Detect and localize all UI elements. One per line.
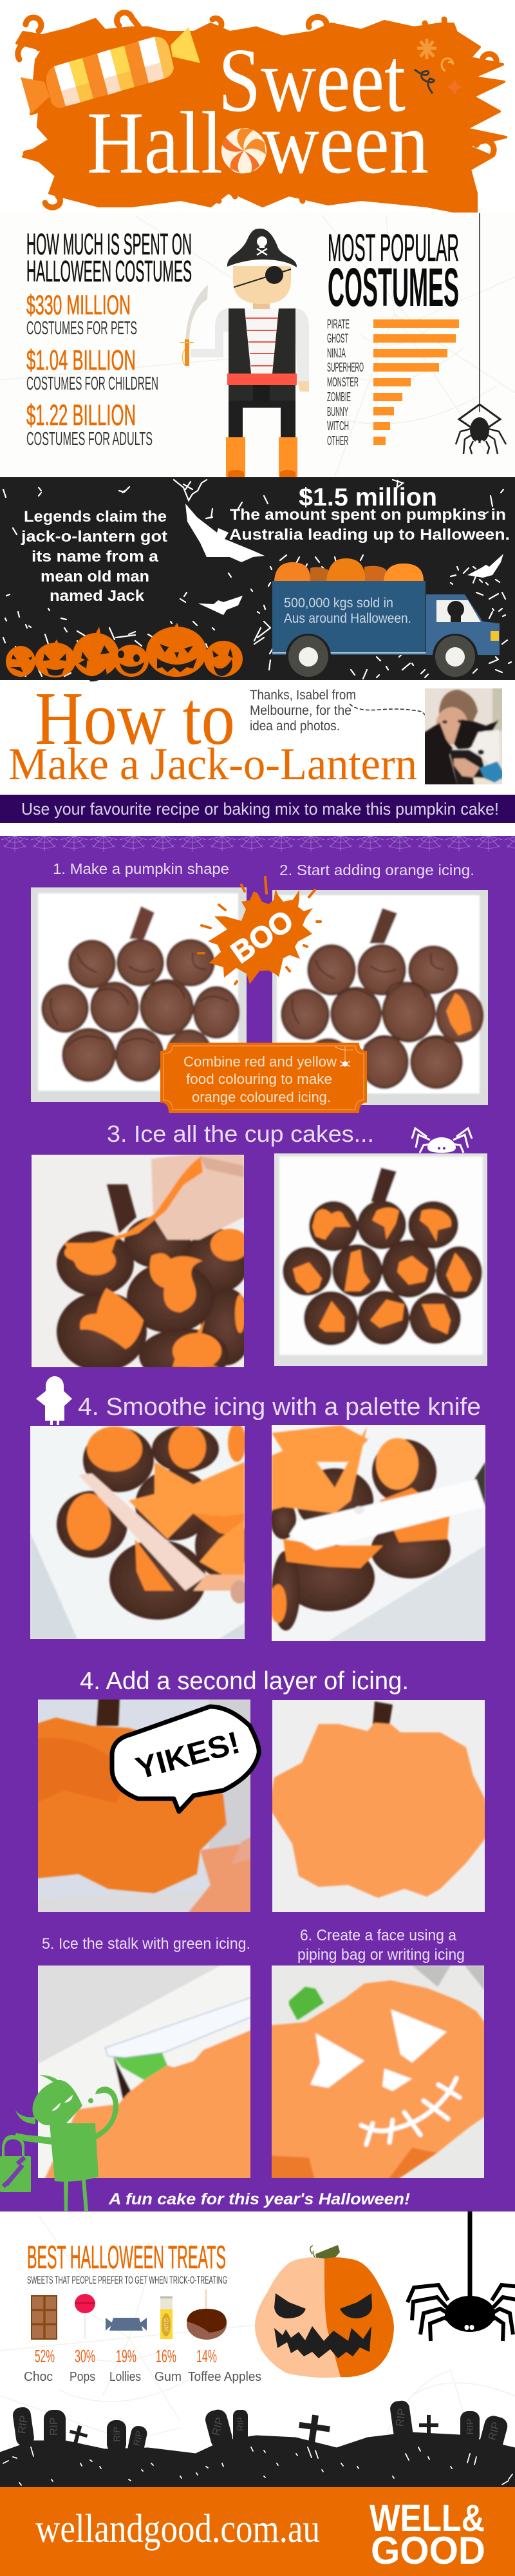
splat: boo: BOO (225, 904, 299, 969)
photo: green stalk (38, 1965, 250, 2178)
icon: ghost (36, 1376, 72, 1425)
callout text: food colouring to make (186, 1071, 332, 1087)
stat: adults (26, 399, 153, 450)
bar chart: popular costumes (327, 317, 459, 448)
logo: well and good (370, 2497, 485, 2572)
hat (227, 229, 297, 267)
photo: Isabel with cat (425, 688, 502, 784)
legs (229, 401, 295, 437)
RIP labels: RIP (393, 2408, 408, 2427)
panel: costumes section (0, 213, 515, 477)
belt (227, 374, 297, 385)
stat: pets: COSTUMES FOR PETS (26, 318, 137, 339)
RIP labels: RIP (131, 2430, 144, 2447)
text: legends claim: its name from a (32, 548, 159, 565)
title text: Sweet: Sweet (218, 29, 406, 131)
RIP labels: RIP (465, 2418, 476, 2435)
heading: make a jack-o-lantern: Make a Jack-o-Lantern (8, 739, 417, 790)
step 6 title: 6. Create a face using a (300, 1927, 457, 1944)
callout spider (335, 1046, 353, 1066)
wheels (286, 634, 478, 679)
logo: well and good: WELL& (370, 2497, 485, 2539)
text: legends claim (21, 508, 167, 605)
bar chart: popular costumes: BUNNY (327, 405, 348, 419)
step 1 title: 1. Make a pumpkin shape (53, 860, 229, 877)
icon: lollipop (75, 2294, 95, 2339)
photo: second layer left (38, 1700, 250, 1912)
bar chart: popular costumes: OTHER (327, 434, 348, 448)
icons: bats (185, 504, 503, 615)
web pattern band (0, 836, 515, 853)
step 4 title: 4. Smoothe icing with a palette knife (78, 1394, 481, 1421)
panel: title banner (17, 13, 506, 213)
dark background (0, 477, 515, 680)
callout: yikes speech bubble: YIKES! (132, 1726, 243, 1786)
text: thanks isabel: Thanks, Isabel from (250, 688, 356, 703)
logo: well and good: GOOD (371, 2529, 485, 2572)
footer background (0, 2487, 515, 2576)
icon: peppermint swirl (221, 128, 267, 173)
panel: jack-o-lantern facts (dark) (0, 477, 515, 681)
stat: pets: $330 MILLION (26, 290, 131, 321)
photo: second layer right (272, 1700, 485, 1912)
eye patch (234, 266, 291, 287)
text: legends claim: Legends claim the (24, 508, 167, 526)
treat percentages: 30% (75, 2346, 95, 2366)
purple background (0, 836, 515, 2211)
photo: iced pumpkin cupcakes (274, 1153, 487, 1366)
splat: boo (198, 877, 321, 984)
illustration: green monster (0, 2075, 118, 2211)
truck text: 500,000 kgs sold in (284, 596, 393, 611)
treat labels: Lollies (109, 2370, 141, 2384)
truck stripe (272, 652, 498, 654)
hand (297, 381, 309, 392)
stat: children: $1.04 BILLION (26, 345, 136, 376)
sword (180, 285, 208, 366)
bar chart: popular costumes: WITCH (327, 419, 349, 433)
stat: adults: $1.22 BILLION (26, 399, 136, 431)
treat percentages: 52% (35, 2346, 55, 2366)
step 6 title (297, 1927, 465, 1964)
subheading: SWEETS THAT PEOPLE PREFER TO GET WHEN TRICK-O-TREATING (27, 2274, 227, 2286)
icon: gum (160, 2296, 173, 2339)
panel: recipe steps (0, 836, 515, 2211)
treat percentages: 14% (196, 2346, 217, 2366)
stat: 1.5 million: $1.5 million (299, 484, 437, 511)
icon: wrapped lolly (106, 2318, 147, 2331)
headlight (491, 631, 499, 641)
treat labels: Choc (24, 2370, 53, 2384)
icon: hanging spider (456, 213, 506, 454)
text: thanks isabel (250, 688, 356, 734)
text: legends claim: named Jack (50, 587, 145, 605)
stat: pets (26, 290, 137, 339)
illustration: row of jack-o-lanterns (6, 623, 243, 681)
icon: white spider (412, 1128, 472, 1153)
illustration: truck (272, 558, 500, 679)
treat labels: Toffee Apples (188, 2370, 261, 2384)
icon: sparkles (415, 39, 462, 95)
truck box (272, 581, 426, 655)
bar chart: popular costumes: SUPERHERO (327, 361, 364, 375)
hills (0, 2432, 515, 2488)
pumpkin load (274, 558, 424, 581)
callout text: orange coloured icing. (192, 1089, 331, 1105)
callout: food colouring (160, 1043, 367, 1113)
treat labels (24, 2370, 261, 2384)
text: thanks isabel: idea and photos. (250, 719, 340, 734)
panel: footer (0, 2487, 515, 2576)
photo: finished face (272, 1965, 484, 2178)
photo: start adding icing (272, 890, 488, 1105)
text: legends claim: jack-o-lantern got (21, 528, 167, 545)
cobweb background (0, 2215, 515, 2441)
panel: best halloween treats (0, 2211, 515, 2441)
icon: gum: GUM (163, 2318, 169, 2331)
website: wellandgood.com.au (35, 2507, 320, 2551)
step 3 title: 3. Ice all the cup cakes... (107, 1121, 374, 1147)
treat percentages (35, 2346, 217, 2366)
torso vest (229, 308, 295, 401)
RIP labels: RIP (486, 2421, 502, 2441)
photo: smoothing left (30, 1426, 245, 1639)
text: amount spent (229, 506, 510, 544)
bar chart: popular costumes: ZOMBIE (327, 390, 351, 404)
ground specks (3, 2447, 512, 2485)
truck text: Aus around Halloween. (284, 611, 411, 626)
head (233, 266, 291, 304)
illustration: half pumpkin (255, 2245, 394, 2378)
stat: children (26, 345, 158, 394)
step 4 second title: 4. Add a second layer of icing. (80, 1667, 409, 1695)
stat: adults: COSTUMES FOR ADULTS (26, 429, 153, 450)
text: amount spent: Australia leading up to Halloween. (229, 526, 510, 544)
treat percentages: 19% (116, 2346, 136, 2366)
RIP labels: RIP (236, 2417, 245, 2431)
step 5 title: 5. Ice the stalk with green icing. (42, 1935, 250, 1953)
bar chart: popular costumes: PIRATE (327, 317, 350, 332)
truck cab (426, 594, 500, 655)
bar chart: popular costumes: GHOST (327, 332, 348, 346)
photo: smoothing right (272, 1425, 485, 1641)
icon: striped candy (21, 27, 200, 114)
step 2 title: 2. Start adding orange icing. (279, 862, 474, 878)
text: legends claim: mean old man (41, 568, 149, 585)
illustration: graveyard (0, 2400, 515, 2488)
icon: toffee apple (187, 2289, 227, 2340)
step 6 title: piping bag or writing icing (297, 1946, 465, 1964)
neck (253, 303, 270, 309)
bar chart: popular costumes: NINJA (327, 346, 346, 361)
cobweb background (0, 216, 515, 477)
treat labels: Pops (70, 2370, 95, 2384)
RIP labels: RIP (210, 2416, 226, 2437)
arms (191, 308, 309, 381)
banner: use your favourite recipe: Use your favourite recipe or baking mix to make this pumpkin cake! (21, 799, 499, 819)
title text: Halloween: Halloween (87, 93, 429, 192)
icon: chocolate bar (32, 2296, 57, 2339)
illustration: pirate (180, 229, 309, 477)
heading: most popular costumes (328, 227, 459, 317)
striped shirt (245, 308, 279, 374)
arrow: dashed to photo (350, 704, 430, 719)
text: amount spent: The amount spent on pumpkins in (230, 506, 506, 524)
RIP labels: RIP (111, 2427, 122, 2442)
truck text (284, 596, 411, 626)
panel: how to heading (8, 676, 505, 790)
treat percentages: 16% (156, 2346, 176, 2366)
icon: big spider (407, 2211, 515, 2341)
photo: pumpkin shape (31, 887, 247, 1102)
treat labels: Gum (154, 2370, 182, 2384)
stat: children: COSTUMES FOR CHILDREN (26, 374, 158, 394)
heading: how much is spent (26, 227, 192, 288)
boots (226, 437, 297, 477)
closing line: A fun cake for this year's Halloween! (108, 2190, 410, 2208)
panel: costumes section: HOW MUCH IS SPENT ON (26, 227, 192, 261)
photo: piping icing (32, 1155, 244, 1367)
bar chart: popular costumes: MONSTER (327, 375, 359, 390)
RIP labels: RIP (15, 2415, 30, 2434)
banner shape (17, 13, 506, 213)
skull and crossbones (257, 236, 267, 255)
panel: best halloween treats: BEST HALLOWEEN TREATS (27, 2239, 226, 2275)
skull driver (447, 601, 464, 622)
panel: costumes section: HALLOWEEN COSTUMES (26, 254, 192, 288)
RIP labels (15, 2408, 502, 2447)
callout text: Combine red and yellow (183, 1054, 337, 1070)
text: thanks isabel: Melbourne, for the (250, 703, 351, 718)
callout: yikes speech bubble (112, 1707, 259, 1812)
banner: use your favourite recipe (0, 795, 515, 823)
RIP labels: RIP (48, 2418, 60, 2436)
gravestones (12, 2400, 509, 2456)
heading: how to: How to (35, 676, 235, 761)
section background (0, 213, 515, 477)
splatter specks (3, 480, 511, 679)
callout text (183, 1054, 337, 1105)
